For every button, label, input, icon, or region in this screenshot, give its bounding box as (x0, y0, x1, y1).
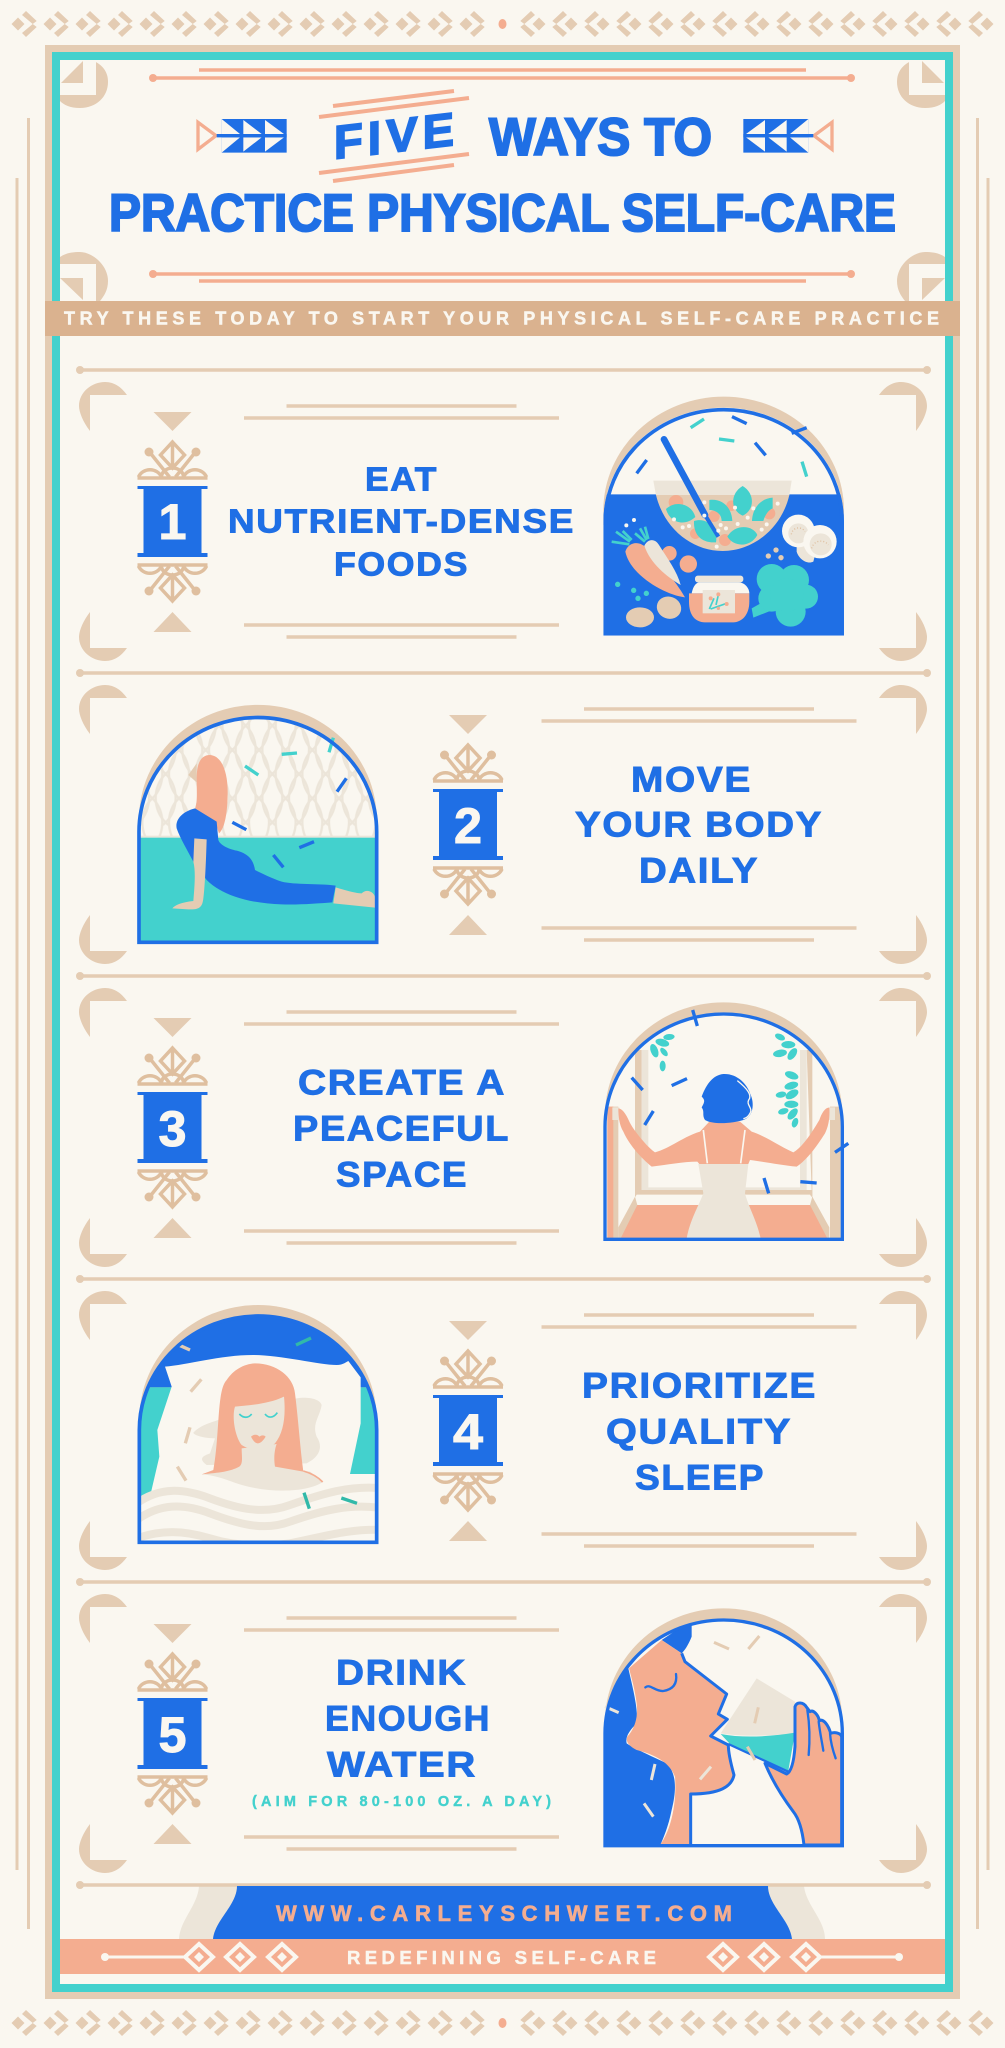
heading: PRIORITIZE (582, 1366, 817, 1406)
heading: WATER (327, 1746, 477, 1784)
woman (202, 1363, 323, 1491)
panel: step 3 (79, 988, 927, 1267)
woman in cobra pose (172, 755, 375, 909)
glass (721, 1678, 795, 1771)
panel: step 5 (79, 1594, 927, 1873)
hand (765, 1703, 842, 1845)
subtitle banner (45, 301, 960, 336)
illustration: drinking water (600, 1608, 842, 1846)
header corner ornaments (60, 60, 945, 301)
tagline band: REDEFINING SELF-CARE (347, 1947, 656, 1968)
mushrooms (782, 515, 837, 563)
number badge 1: 1 (158, 494, 186, 550)
heading: DAILY (639, 852, 759, 890)
five tag rules (319, 91, 469, 181)
website tab (76, 1881, 931, 1939)
illustration: food (603, 396, 844, 636)
heading: NUTRIENT-DENSE (228, 502, 575, 540)
title: practice physical self-care: PRACTICE PHYSICAL SELF-CARE (109, 184, 896, 243)
heading: DRINK (336, 1654, 467, 1692)
note: (AIM FOR 80-100 OZ. A DAY) (252, 1794, 551, 1810)
number badge 3: 3 (158, 1101, 186, 1157)
heading: MOVE (631, 760, 752, 800)
heading (293, 1064, 510, 1194)
number badge 4: 4 (453, 1404, 483, 1460)
top decorative border (11, 10, 994, 38)
heading: QUALITY (606, 1412, 792, 1452)
panel: step 4 (79, 1291, 927, 1570)
panel: step 1 (79, 382, 927, 661)
website tab: WWW.CARLEYSCHWEET.COM (276, 1901, 732, 1926)
number badge 1 (138, 412, 208, 632)
number badge 5: 5 (158, 1707, 186, 1763)
heading: FOODS (334, 546, 469, 582)
heading: SPACE (336, 1156, 468, 1194)
icon: left arrow (198, 119, 287, 153)
panel: step 2 (79, 685, 927, 964)
number badge 3 (138, 1018, 208, 1238)
title: ways to: WAYS TO (489, 108, 712, 167)
number badge 2 (433, 715, 503, 935)
broccoli (752, 564, 818, 627)
heading (325, 1654, 491, 1784)
jar (689, 576, 749, 622)
subtitle banner: TRY THESE TODAY TO START YOUR PHYSICAL SELF-CARE PRACTICE (64, 308, 939, 328)
bowl (653, 439, 792, 551)
panel: header (60, 60, 945, 301)
heading (575, 760, 823, 890)
header rules (149, 70, 855, 281)
number badge 5 (138, 1624, 208, 1844)
heading: ENOUGH (325, 1700, 491, 1738)
row dividers (76, 366, 931, 1586)
heading: SLEEP (635, 1458, 765, 1498)
heading (228, 460, 575, 582)
title: five: FIVE (334, 102, 454, 169)
number badge 2: 2 (454, 798, 482, 854)
eye (645, 1674, 676, 1691)
face and neck (627, 1640, 734, 1845)
heading: CREATE A (298, 1064, 506, 1102)
tagline band (60, 1939, 945, 1974)
illustration: yoga (137, 704, 378, 944)
heading: PEACEFUL (293, 1110, 510, 1148)
heading (582, 1366, 817, 1498)
illustration: sleep (138, 1305, 378, 1544)
illustration: open window (605, 1002, 848, 1239)
woman (618, 1074, 829, 1238)
heading: EAT (365, 460, 438, 498)
bottom decorative border (11, 2010, 994, 2036)
icon: right arrow (743, 119, 832, 153)
heading: YOUR BODY (575, 806, 823, 844)
leaves (648, 1032, 800, 1128)
window frame (607, 1050, 841, 1238)
vegetables (612, 518, 784, 627)
hair (600, 1620, 692, 1846)
blanket (137, 1485, 380, 1547)
pillow (151, 1355, 375, 1506)
footer (60, 1881, 945, 1974)
number badge 4 (433, 1321, 503, 1541)
hair shadow (193, 1398, 322, 1465)
